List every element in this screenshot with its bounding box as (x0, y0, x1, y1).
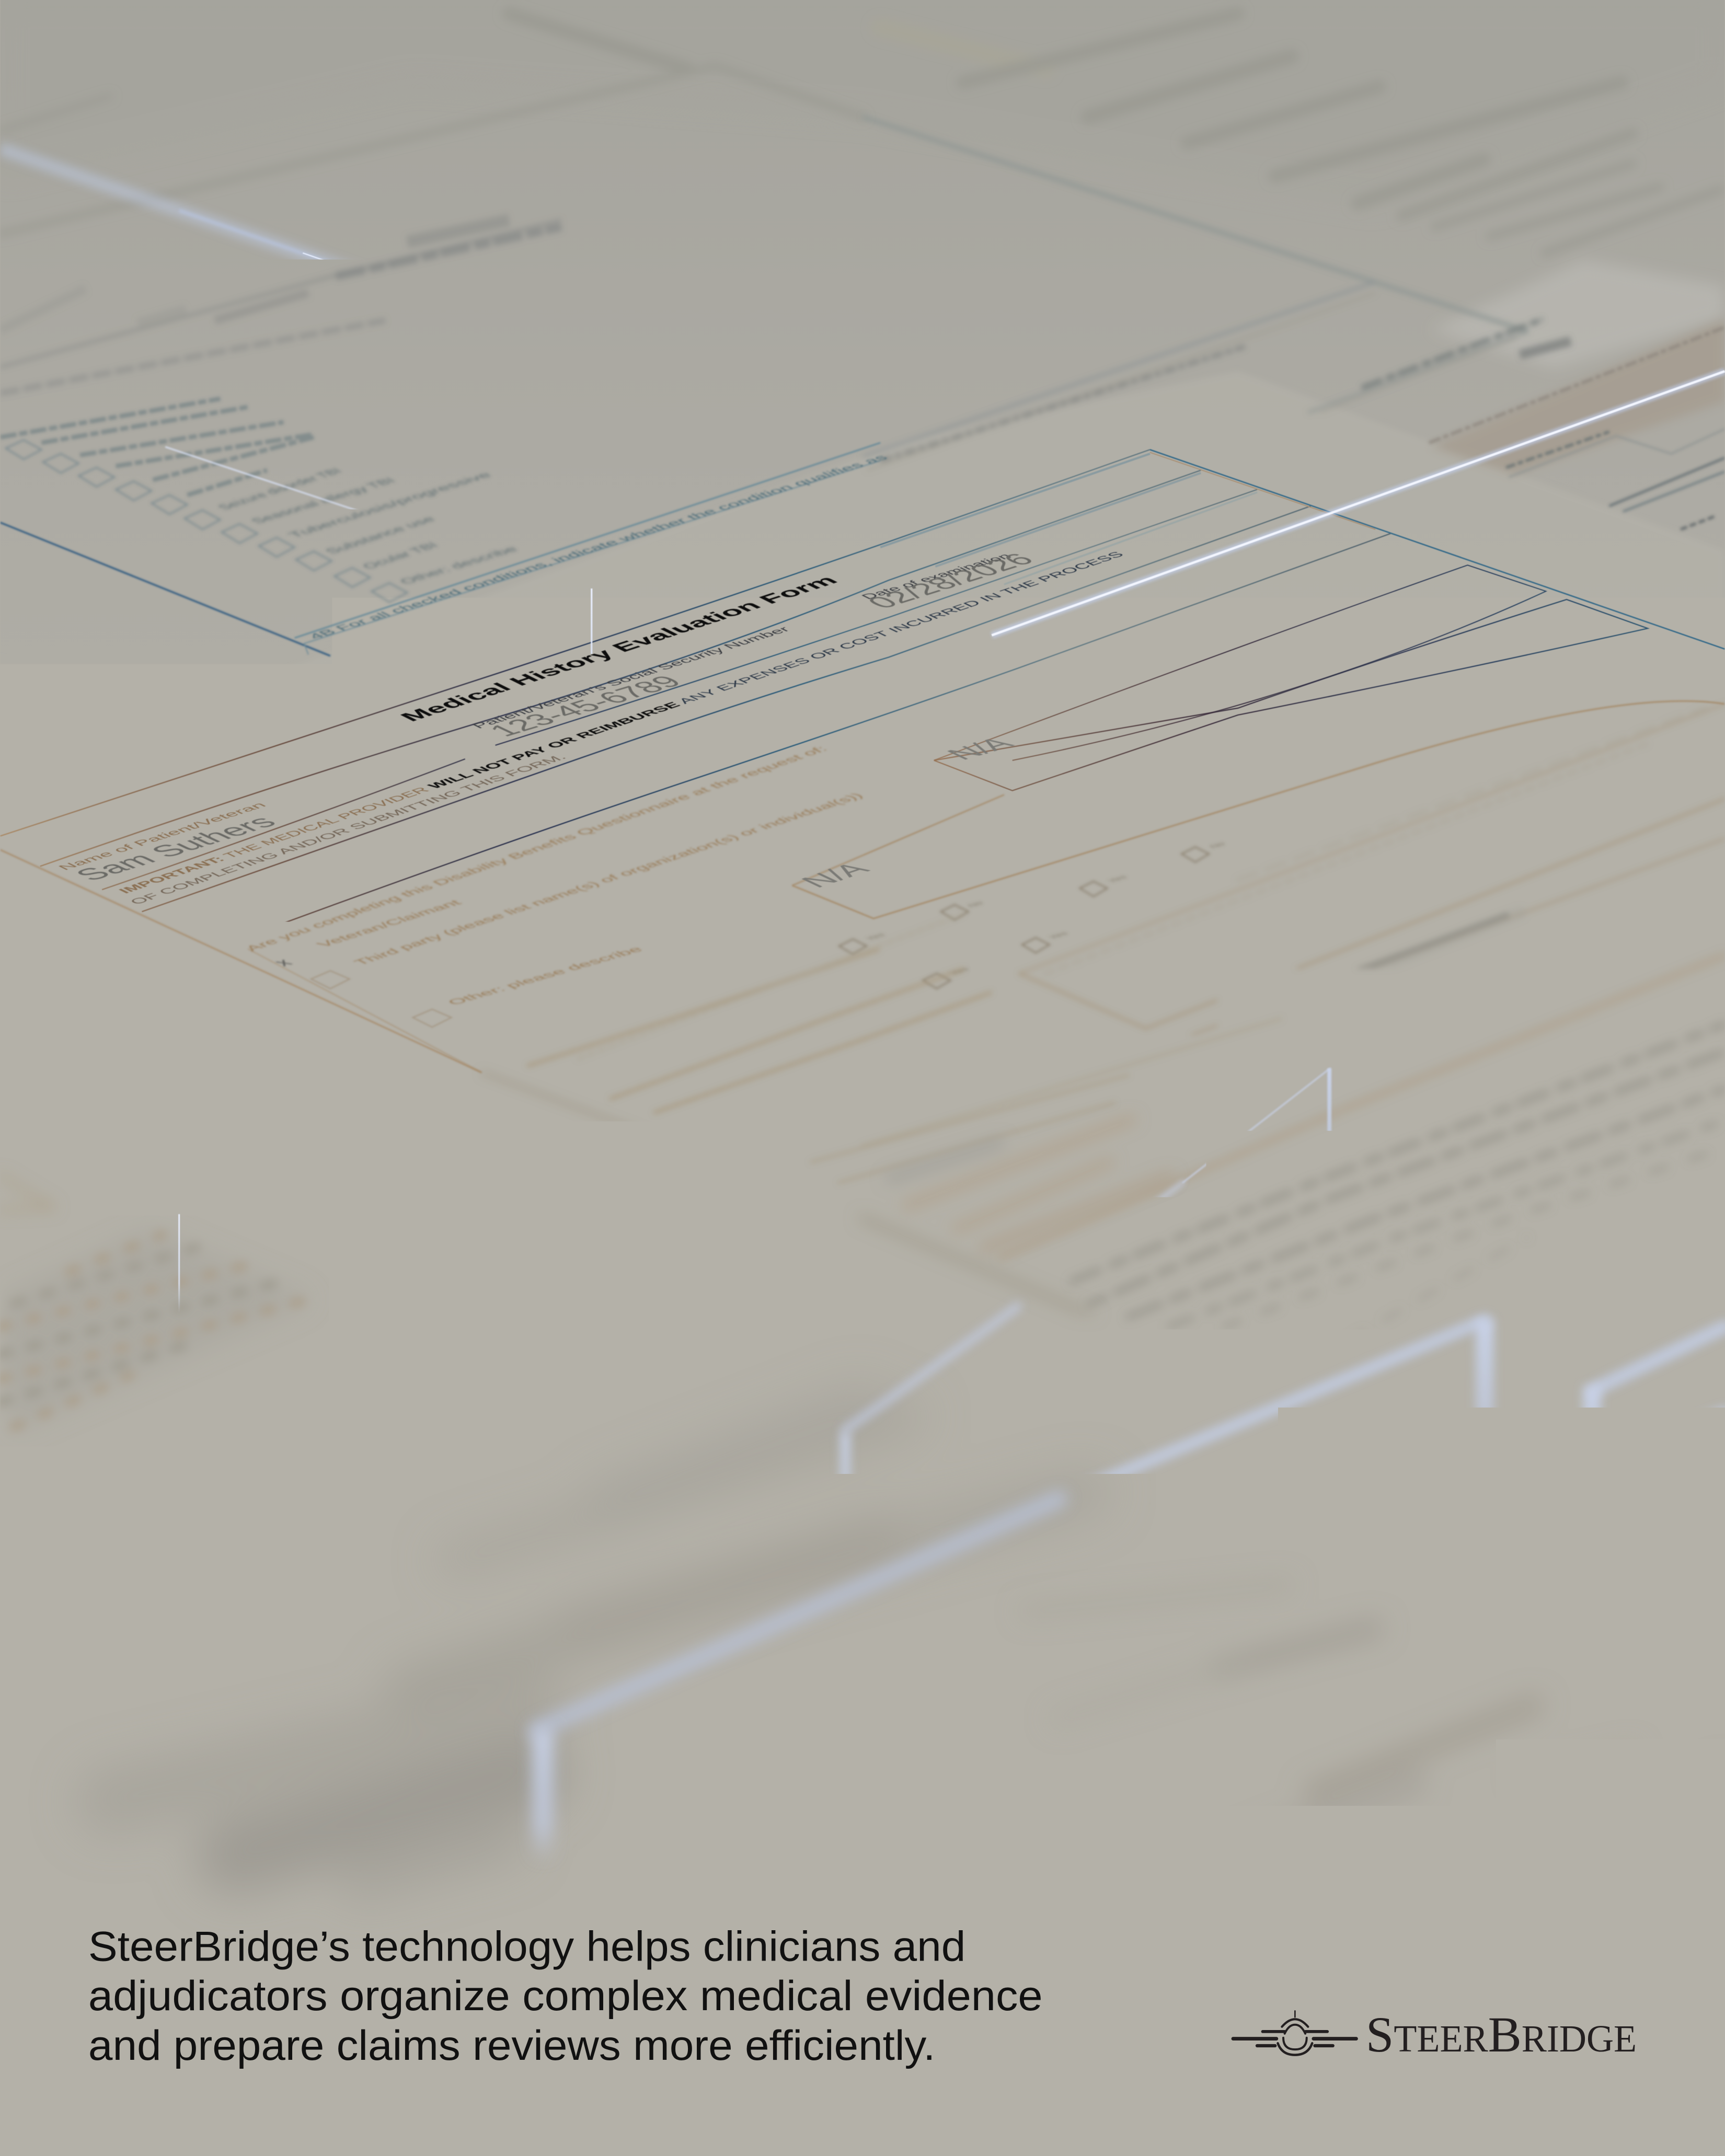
checklist labels: Tuberculosis/progressive (285, 471, 496, 539)
yes/no labels: Yes (863, 932, 887, 941)
checklist labels (214, 467, 521, 585)
light trace: right trace to no box (1200, 576, 1724, 850)
caption text: and prepare claims reviews more efficiently. (88, 2022, 935, 2069)
yes/no labels: Yes (1105, 874, 1129, 883)
panel: main form frame lines (1, 449, 1724, 942)
yes/no labels: Yes (947, 966, 971, 976)
panel: main form text in focus: 123-45-6789 (481, 672, 689, 740)
panel: right edge form fragments (1429, 327, 1724, 529)
yes/no labels: No (965, 900, 985, 908)
checkbox rows (6, 440, 407, 602)
caption text: SteerBridge’s technology helps clinicians and (88, 1923, 965, 1970)
yes/no labels (863, 841, 1227, 976)
light trace: right trace to yes box (1045, 549, 1724, 943)
panel: paragraph of blurred dashes, lower right (1000, 955, 1724, 1341)
form title: Medical History Evaluation Form (395, 573, 843, 724)
light trace: lower right trace 1 (1583, 1327, 1724, 1502)
panel: requester section, slightly out of focus: Veteran/Claimant (314, 898, 465, 949)
panel: yes/no checkboxes (839, 841, 1227, 989)
field: SSN: Patient/Veteran’s Social Security Number (469, 625, 794, 730)
checklist labels: Other: describe (396, 545, 521, 585)
caption text: adjudicators organize complex medical evidence (88, 1973, 1043, 2020)
light trace: bright right trace to N/A box (991, 371, 1724, 751)
light trace: blurred mid trace (841, 1068, 1331, 1559)
panel: main form text in focus: OF COMPLETING AND/OR SUBMITTING THIS FORM. (126, 753, 570, 906)
checklist labels: Substance use (322, 515, 439, 556)
panel: main form text in focus: Sam Suthers (67, 812, 284, 884)
field: patient name: Name of Patient/Veteran (55, 801, 270, 872)
caption text (88, 1923, 1043, 2069)
panel: left lower-form rows, blurred (1, 1119, 1724, 1581)
light trace: long centre trace with left drop (178, 876, 1110, 1313)
panel: foreground out-of-focus document (110, 1402, 1087, 1884)
panel: main form text in focus: N/A (793, 859, 877, 891)
panel: main form text in focus: 02/28/2026 (859, 550, 1042, 612)
panel: requester section, slightly out of focus (242, 745, 866, 1027)
panel: main form text in focus (55, 550, 1127, 906)
light trace: top left to date field (1, 148, 931, 594)
light trace: to SSN field (1, 392, 592, 712)
light trace: to first yes box (1, 832, 850, 1142)
checklist labels: Ocular TBI (359, 541, 442, 571)
N/A entries: N/A (939, 734, 1021, 763)
4B caption: 4B For all checked conditions, indicate whether the condition qualifies as (305, 453, 891, 641)
panel: mid form rows, soft focus (528, 704, 1724, 1182)
logo: SteerBridge (1233, 2007, 1637, 2062)
panel: far top form, heavily blurred (1, 14, 1721, 253)
panel: checklist on upper form (1, 399, 521, 602)
icon: logo bridge mark (1233, 2011, 1356, 2055)
panel: N/A response boxes (1, 565, 1724, 1216)
checklist labels: Seasonal allergy TBI (247, 476, 399, 525)
checklist labels: Seizure disorder TBI (214, 467, 346, 512)
yes/no labels: Yes (1046, 931, 1070, 940)
panel: requester section, slightly out of focus: Third party (please list name(s) of organization(s) or individual(s)) (351, 791, 866, 966)
field: date of examination: Date of examination (858, 552, 1015, 601)
panel: blurred dot-matrix text block, left (1, 1231, 314, 1430)
checked mark: x (269, 956, 297, 969)
question line: Are you completing this Disability Benefits Questionnaire at the request of: (242, 745, 831, 953)
light trace: to patient name (1, 657, 191, 850)
important notice: IMPORTANT: THE MEDICAL PROVIDER WILL NOT PAY OR REIMBURSE ANY EXPENSES OR COST INCURRED IN THE PROCESS (115, 550, 1127, 895)
light trace: to veteran checkbox (1, 848, 309, 964)
panel: requester section, slightly out of focus: Other: please describe (444, 946, 647, 1007)
yes/no labels: No (1207, 841, 1227, 849)
panel: upper form bottom section with 4B line (1, 443, 891, 656)
light trace: large blurred foreground trace (533, 1320, 1494, 1862)
wordmark: STEERBRIDGE (1366, 2007, 1637, 2062)
light trace: lower right trace 2 (1675, 1413, 1724, 1543)
panel: upper form box lines (1, 117, 1571, 470)
panel: foreground streaks, right (963, 1585, 1724, 2062)
